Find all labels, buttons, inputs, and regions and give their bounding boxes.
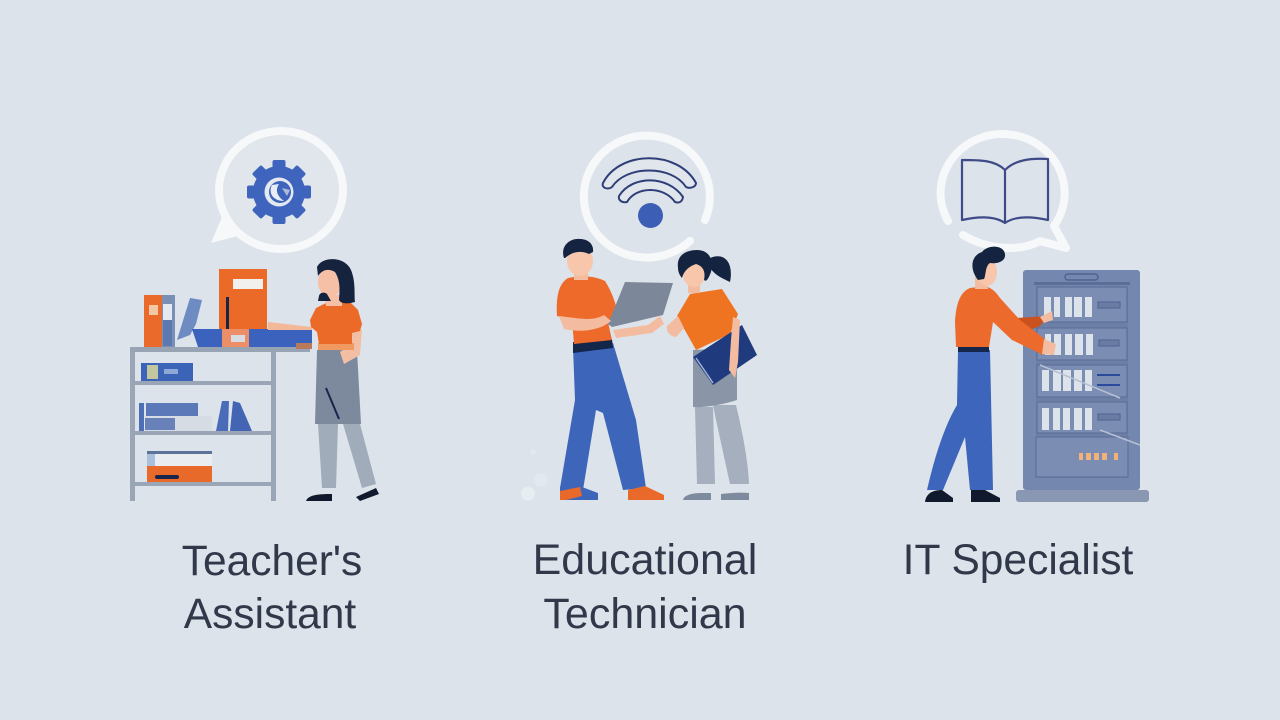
books on shelf xyxy=(139,401,252,431)
rack row 1 xyxy=(1037,287,1127,322)
rack row 2 xyxy=(1037,328,1127,360)
label: Teacher's Assistant: Assistant xyxy=(184,591,356,638)
label: Teacher's Assistant: Teacher's xyxy=(182,538,362,585)
speech bubble: wifi xyxy=(584,136,710,258)
blue box xyxy=(192,322,312,349)
rack row 4 xyxy=(1037,402,1127,433)
laptop xyxy=(608,282,673,327)
binder xyxy=(144,295,175,347)
orange book xyxy=(219,269,267,331)
orange box on shelf xyxy=(147,451,212,482)
folder and woman figure xyxy=(667,250,757,500)
icon: gear with globe xyxy=(247,160,311,224)
rack row 3 xyxy=(1037,365,1127,397)
panel: Teacher's Assistant xyxy=(130,131,379,638)
panel: Educational Technician xyxy=(521,136,757,638)
lab box on shelf xyxy=(141,363,193,381)
label: Educational Technician: Educational xyxy=(533,536,757,584)
icon: open book xyxy=(962,159,1048,223)
tablet xyxy=(177,298,202,340)
label: IT Specialist: IT Specialist xyxy=(903,537,1134,584)
man arms xyxy=(559,315,664,338)
speech bubble: book xyxy=(941,134,1066,248)
man figure xyxy=(925,247,1056,502)
paper scraps near foot xyxy=(521,449,548,501)
server rack xyxy=(1016,270,1149,502)
woman figure xyxy=(306,259,379,501)
panel: IT Specialist xyxy=(903,134,1149,584)
speech bubble: gear xyxy=(211,131,343,249)
shelf xyxy=(130,347,310,501)
icon: wifi xyxy=(603,158,696,228)
man figure xyxy=(557,239,664,500)
label: Educational Technician: Technician xyxy=(543,590,747,638)
rack row 5 with indicator lights xyxy=(1036,437,1128,477)
